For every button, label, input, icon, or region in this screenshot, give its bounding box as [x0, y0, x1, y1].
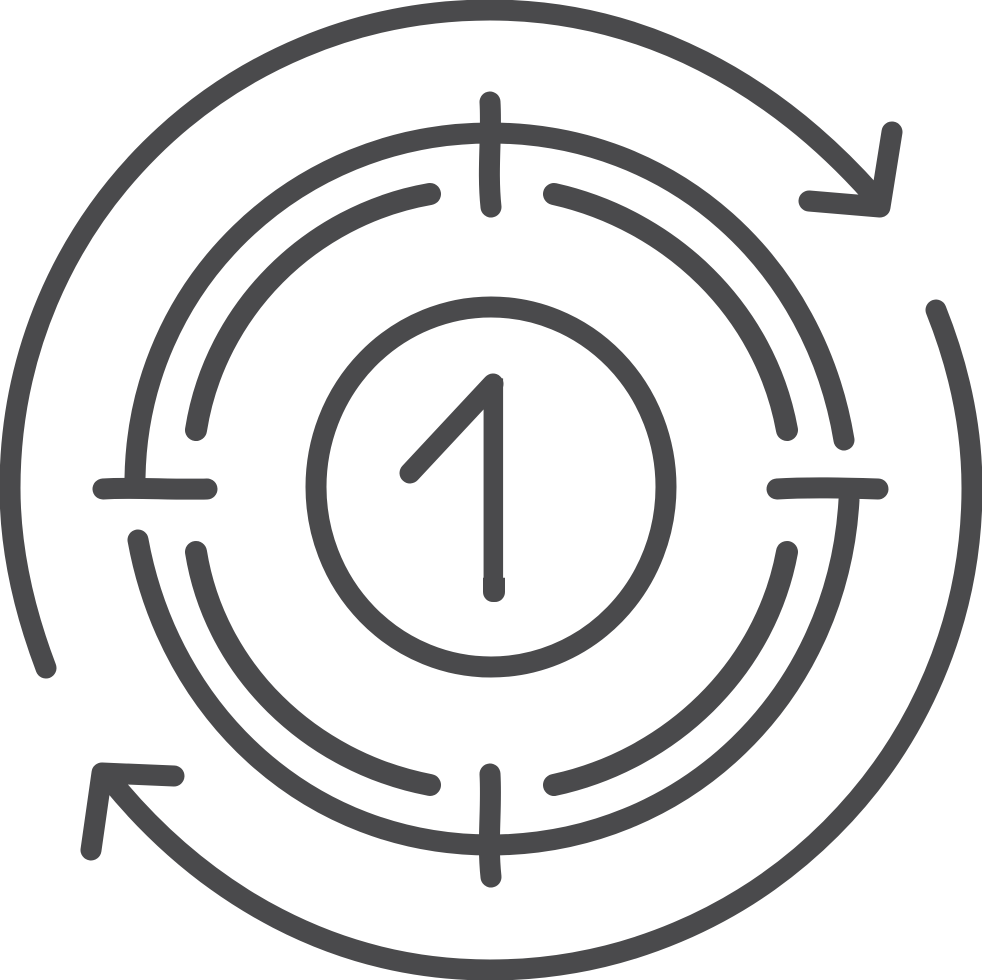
crosshair tick: left	[103, 478, 207, 500]
inner ring: lower left segment	[196, 552, 430, 785]
crosshair tick: top	[489, 102, 491, 207]
crosshair tick: right	[777, 488, 878, 489]
number one flag stroke	[410, 384, 493, 473]
outer ring: lower segment	[138, 500, 849, 845]
inner ring: upper left segment	[196, 194, 430, 430]
arrow: upper circular arrow	[10, 10, 892, 668]
inner ring: upper right segment	[554, 194, 787, 430]
inner ring: lower right segment	[554, 552, 787, 785]
center circle	[316, 307, 666, 667]
arrow: lower circular arrow	[91, 310, 972, 970]
outer ring: upper segment	[135, 133, 844, 478]
number one: 1	[428, 307, 551, 671]
crosshair tick: bottom	[489, 774, 491, 877]
